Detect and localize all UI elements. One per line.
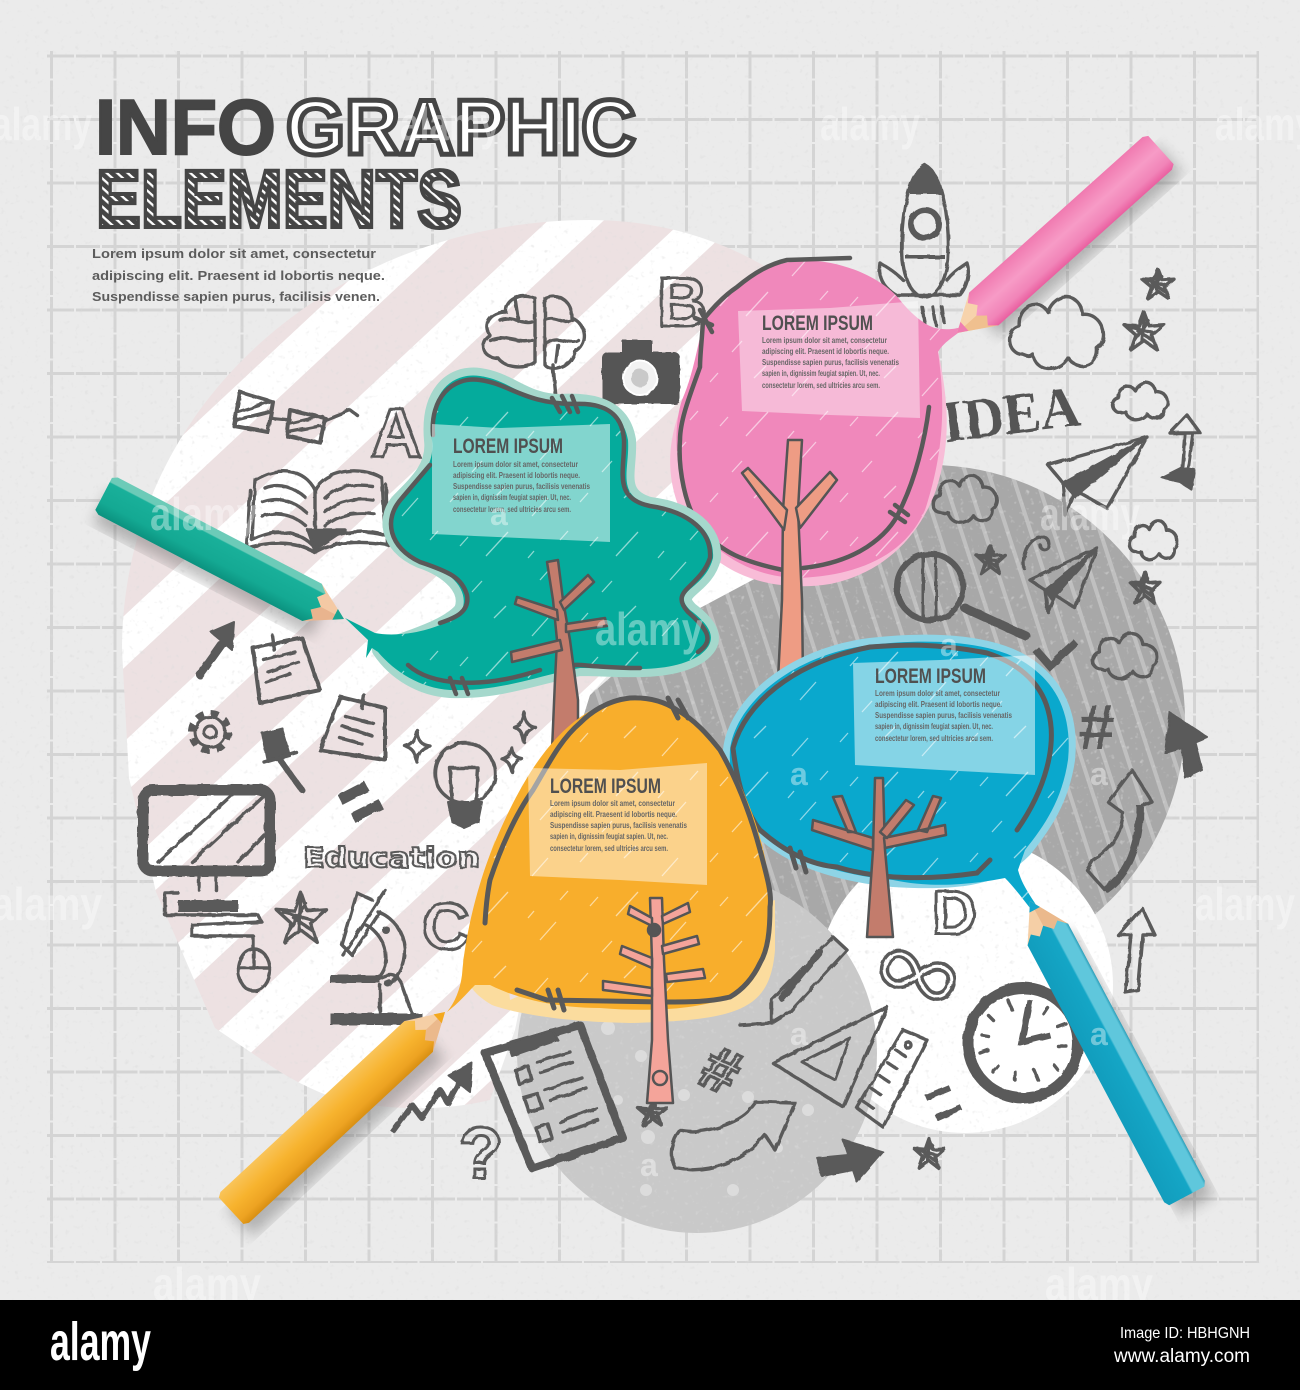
body text: consectetur lorem, sed ultricies arcu sem. <box>453 505 571 514</box>
icon: sparkle left <box>405 730 430 762</box>
icon: pencil doodle <box>740 937 847 1025</box>
footer logo: alamy <box>50 1312 151 1372</box>
white circle backdrop <box>817 837 1113 1133</box>
blue pencil <box>1010 890 1214 1214</box>
heading: LOREM IPSUM <box>453 435 563 458</box>
icon: infinity <box>881 950 955 1000</box>
icon: star on grey <box>976 546 1005 574</box>
body text: adipiscing elit. Praesent id lobortis neque. <box>453 471 580 480</box>
body text: adipiscing elit. Praesent id lobortis neque. <box>762 347 889 356</box>
yellow tree <box>603 898 705 1103</box>
body text <box>453 460 590 514</box>
text box: pink <box>738 301 920 418</box>
body text: sapien in, dignissim feugiat sapien. Ut, nec. <box>875 722 993 731</box>
intro paragraph: Lorem ipsum dolor sit amet, consectetur <box>92 247 376 261</box>
watermarks: alamy <box>1040 488 1140 540</box>
icon: pinned note <box>253 635 320 703</box>
icon: brain <box>483 296 584 398</box>
body text: consectetur lorem, sed ultricies arcu sem. <box>875 734 993 743</box>
icon: check mark <box>1036 642 1076 666</box>
body text: consectetur lorem, sed ultricies arcu sem. <box>762 381 880 390</box>
icon: star lower <box>914 1139 944 1168</box>
icon: filled up arrow <box>1165 713 1207 778</box>
icon: rocket <box>880 165 968 325</box>
striped pink circle backdrop <box>122 220 790 1108</box>
body text: Suspendisse sapien purus, facilisis venenatis <box>762 358 899 367</box>
title line: INFO: INFO <box>95 83 276 171</box>
body text: sapien in, dignissim feugiat sapien. Ut, nec. <box>762 369 880 378</box>
icon: star second <box>1124 312 1164 350</box>
body text <box>550 799 687 853</box>
text: Education: Education <box>303 841 480 874</box>
watermarks: a <box>490 496 508 532</box>
blue speech blob <box>730 642 1069 908</box>
icon: small cloud <box>1113 383 1168 420</box>
icon: star right <box>1130 572 1160 603</box>
icon: clock <box>968 988 1078 1098</box>
pale dots on grey circle <box>601 1021 814 1196</box>
pale halo <box>380 376 713 690</box>
title line: ELEMENTS: ELEMENTS <box>96 154 462 245</box>
icon: zigzag arrow <box>392 1063 472 1132</box>
body text: Lorem ipsum dolor sit amet, consectetur <box>875 689 1000 698</box>
icon: camera <box>602 340 680 404</box>
image id: Image ID: HBHGNH <box>1120 1325 1250 1342</box>
blue tree <box>812 778 946 937</box>
teal tree <box>511 560 607 750</box>
body text: sapien in, dignissim feugiat sapien. Ut, nec. <box>550 832 668 841</box>
icon: scribbled star <box>276 893 326 942</box>
text: IDEA: IDEA <box>939 374 1084 455</box>
icon: gear <box>191 713 229 751</box>
intro paragraph: adipiscing elit. Praesent id lobortis neque. <box>92 269 385 283</box>
body text: adipiscing elit. Praesent id lobortis neque. <box>550 810 677 819</box>
watermarks: alamy <box>595 603 703 655</box>
icon: paper plane on grey <box>1030 548 1097 612</box>
yellow pencil <box>217 997 459 1237</box>
teal speech blob <box>345 376 713 694</box>
blob outline <box>391 380 710 694</box>
heading: LOREM IPSUM <box>875 665 986 688</box>
intro paragraph <box>92 247 385 304</box>
watermarks: a <box>1090 1016 1108 1052</box>
body text: Lorem ipsum dolor sit amet, consectetur <box>550 799 675 808</box>
body text: consectetur lorem, sed ultricies arcu sem. <box>550 844 668 853</box>
icon: hash sign: # <box>1079 691 1115 763</box>
pink tree <box>742 440 837 680</box>
striped grey circle backdrop <box>675 465 1185 975</box>
icon: large cloud <box>1010 297 1103 369</box>
body text: Suspendisse sapien purus, facilisis venenatis <box>550 821 687 830</box>
watermarks: alamy <box>153 1258 261 1310</box>
body text: Suspendisse sapien purus, facilisis venenatis <box>453 482 590 491</box>
blob outline <box>733 645 1051 878</box>
icon: curved arrow <box>671 1102 795 1170</box>
icon: triangle ruler <box>773 1007 887 1107</box>
letter D: D <box>932 879 977 948</box>
light grey circle backdrop <box>517 873 877 1233</box>
body text: Lorem ipsum dolor sit amet, consectetur <box>453 460 578 469</box>
icon: star top right <box>1142 270 1174 298</box>
icon: cloud on grey <box>933 476 997 523</box>
text box: yellow <box>528 763 707 885</box>
icon: sparkles right <box>502 712 535 772</box>
icon: paper plane <box>1048 437 1147 515</box>
letter A: A <box>371 394 422 472</box>
pale halo <box>463 840 775 1023</box>
icon: equals sign <box>340 786 381 818</box>
striped grey wedge <box>570 600 780 790</box>
text box: teal <box>432 424 610 542</box>
icon: pushpin <box>262 728 302 790</box>
body text <box>875 689 1012 743</box>
watermarks: a <box>790 1016 808 1052</box>
icon: filled arrow <box>817 1140 883 1182</box>
footer bar <box>0 1300 1300 1390</box>
icon: arrow up outline <box>1162 415 1200 490</box>
watermarks: alamy <box>150 488 258 540</box>
watermarks: alamy <box>820 98 920 150</box>
text box: blue <box>853 655 1035 775</box>
body text: Lorem ipsum dolor sit amet, consectetur <box>762 336 887 345</box>
icon: equals sign lower <box>926 1088 961 1118</box>
watermarks: alamy <box>400 98 500 150</box>
watermarks: a <box>940 627 958 663</box>
teal pencil <box>93 475 354 638</box>
letter C: C <box>422 889 470 963</box>
watermarks: a <box>640 1147 658 1183</box>
watermarks: a <box>1090 756 1108 792</box>
icon: cloud right <box>1129 521 1177 560</box>
body text <box>762 336 899 390</box>
yellow speech blob <box>447 698 775 1023</box>
body text: adipiscing elit. Praesent id lobortis neque. <box>875 700 1002 709</box>
icon: hash on grey: # <box>690 1032 751 1109</box>
icon: pinned note 2 <box>320 695 385 760</box>
body text: Suspendisse sapien purus, facilisis venenatis <box>875 711 1012 720</box>
icon: open book <box>247 471 388 553</box>
letter B: B <box>657 263 708 341</box>
pink pencil <box>942 134 1183 349</box>
icon: thin up arrow <box>1118 908 1155 992</box>
icon: arrow up right <box>200 622 234 675</box>
icon: microscope <box>330 890 422 1025</box>
title <box>95 83 636 245</box>
icon: ruler <box>857 1030 927 1127</box>
title line: GRAPHIC: GRAPHIC <box>286 83 636 171</box>
blob outline <box>680 258 929 570</box>
icon: magnifier <box>897 554 1026 636</box>
heading: LOREM IPSUM <box>550 775 661 798</box>
intro paragraph: Suspendisse sapien purus, facilisis venen. <box>92 290 380 304</box>
icon: glasses <box>234 392 358 443</box>
heading: LOREM IPSUM <box>762 312 873 335</box>
icon: large curved arrow <box>1087 770 1152 890</box>
pink speech blob <box>670 258 967 586</box>
icon: computer and mouse <box>143 790 270 991</box>
pale halo <box>730 642 1069 881</box>
icon: curly mark <box>1023 537 1049 568</box>
icon: clipboard checklist <box>485 1025 623 1168</box>
body text: sapien in, dignissim feugiat sapien. Ut, nec. <box>453 493 571 502</box>
watermarks: a <box>790 756 808 792</box>
icon: star under tree <box>638 1099 667 1125</box>
blob outline <box>485 698 771 1010</box>
watermarks: alamy <box>1045 1258 1153 1310</box>
icon: cloud lower right <box>1093 634 1157 679</box>
pale halo <box>670 350 947 586</box>
doodle icons <box>143 165 1207 1194</box>
website: www.alamy.com <box>1113 1346 1250 1367</box>
icon: question mark: ? <box>459 1114 503 1194</box>
icon: light bulb <box>435 743 495 828</box>
